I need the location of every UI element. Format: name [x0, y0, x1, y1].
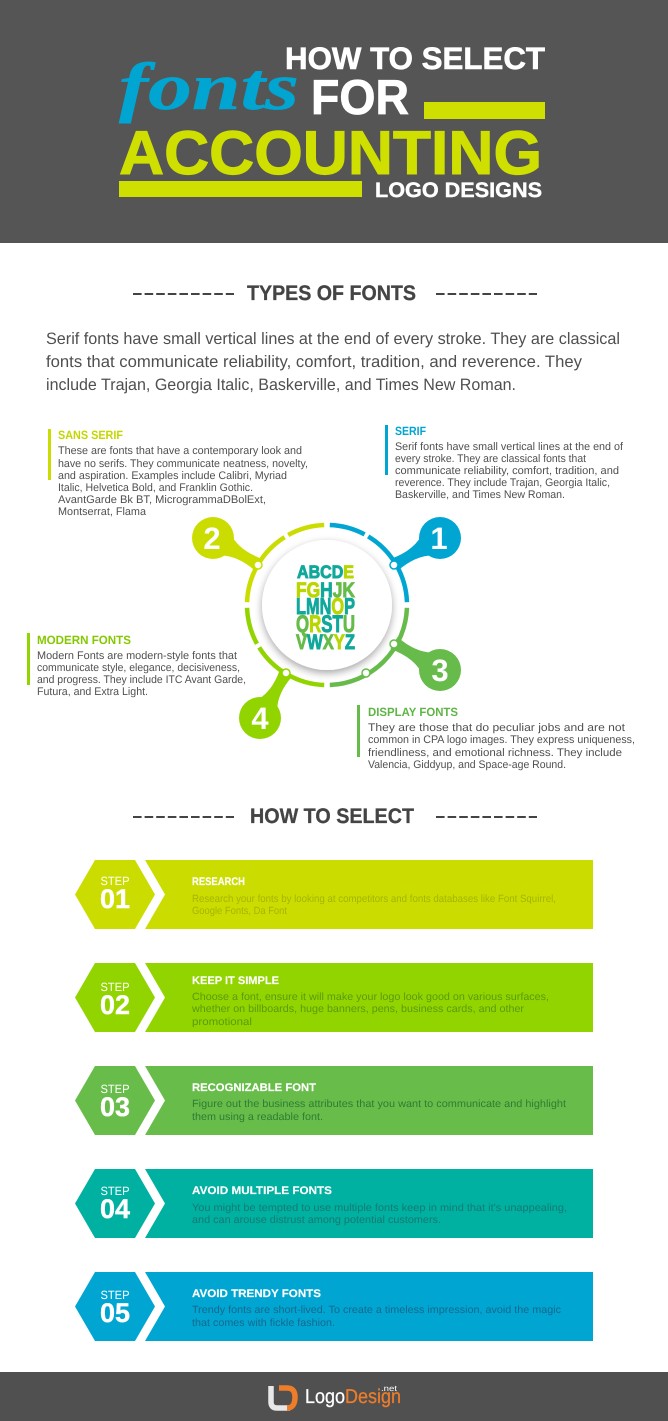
node 4: 4 [251, 701, 269, 736]
step 3: them using a readable font. [192, 1111, 323, 1123]
step 1: Research your fonts by looking at competitors and fonts databases like Font Squirrel, [192, 893, 556, 905]
title: how to select: HOW TO SELECT [285, 41, 545, 76]
step 2: 02 [100, 990, 130, 1020]
intro paragraph: include Trajan, Georgia Italic, Baskerville, and Times New Roman. [46, 376, 516, 394]
text block: display fonts: Valencia, Giddyup, and Space-age Round. [368, 759, 566, 771]
text block: sans serif: and aspiration. Examples include Calibri, Myriad [58, 470, 287, 482]
title accent bar right [424, 102, 545, 119]
text block: serif: communicate reliability, comfort, tradition, and [395, 465, 619, 477]
step 2 [75, 963, 593, 1032]
text block: modern fonts: Modern Fonts are modern-style fonts that [37, 650, 237, 662]
alphabet artwork: QRSTU [296, 611, 355, 638]
text block: sans serif: SANS SERIF [58, 428, 123, 442]
text block: modern fonts: Futura, and Extra Light. [37, 686, 148, 698]
step 1 [75, 860, 593, 929]
step 3: 03 [100, 1092, 130, 1122]
node 1 [390, 517, 461, 571]
title: logo designs: LOGO DESIGNS [375, 179, 542, 202]
text block: serif: Baskerville, and Times New Roman. [395, 489, 565, 501]
text block: sans serif [48, 428, 308, 518]
alphabet artwork: ABCDE [297, 562, 354, 582]
text block: sans serif: AvantGarde Bk BT, MicrogrammaDBolExt, [58, 494, 266, 506]
text block: display fonts: common in CPA logo images. They express uniqueness, [368, 734, 635, 746]
step 5: that comes with fickle fashion. [192, 1317, 335, 1329]
node 2 [192, 517, 262, 571]
step 1: STEP [100, 874, 130, 888]
alphabet artwork [296, 562, 355, 654]
step 3: RECOGNIZABLE FONT [192, 1082, 316, 1094]
text block: sans serif: Montserrat, Flama [58, 506, 147, 518]
title: accounting: ACCOUNTING [119, 119, 542, 188]
step 4: You might be tempted to use multiple fonts keep in mind that it's unappealing, [192, 1202, 567, 1214]
center disc [262, 540, 392, 670]
text block: display fonts: They are those that do peculiar jobs and are not [368, 722, 625, 734]
text block: serif: reverence. They include Trajan, Georgia Italic, [395, 477, 610, 489]
header banner [0, 0, 668, 243]
footer [0, 1372, 668, 1421]
step 4: STEP [100, 1184, 130, 1198]
step 4: AVOID MULTIPLE FONTS [192, 1185, 332, 1197]
step 2: STEP [100, 980, 130, 994]
step 5: 05 [100, 1298, 130, 1328]
text block: modern fonts [27, 633, 246, 698]
icon: logo mark [271, 1386, 295, 1408]
text block: sans serif: have no serifs. They communicate neatness, novelty, [58, 458, 308, 470]
step 2: Choose a font, ensure it will make your logo look good on various surfaces, [192, 991, 549, 1003]
step 1: 01 [100, 884, 130, 914]
step 4: 04 [100, 1194, 130, 1224]
step 3: Figure out the business attributes that you want to communicate and highlight [192, 1098, 566, 1110]
alphabet artwork: FGHJK [296, 579, 355, 602]
step 2: promotional [192, 1016, 252, 1028]
text block: serif: every stroke. They are classical fonts that [395, 453, 586, 465]
step 4: and can arouse distrust among potential customers. [192, 1214, 441, 1226]
text block: display fonts: DISPLAY FONTS [368, 705, 458, 719]
text block: modern fonts: MODERN FONTS [37, 633, 131, 647]
text block: modern fonts: communicate style, elegance, decisiveness, [37, 662, 240, 674]
circular diagram [192, 517, 461, 739]
text block: serif: SERIF [395, 424, 426, 438]
title: fonts: fonts [119, 50, 299, 124]
intro paragraph: Serif fonts have small vertical lines at the end of every stroke. They are classical [46, 330, 620, 348]
title accent bar left [119, 181, 362, 197]
title: for: FOR [311, 71, 409, 125]
step 3: STEP [100, 1082, 130, 1096]
step 5: AVOID TRENDY FONTS [192, 1288, 321, 1300]
intro paragraph: fonts that communicate reliability, comfort, tradition, and reverence. They [46, 353, 583, 371]
node 2: 2 [203, 521, 221, 556]
text block: serif: Serif fonts have small vertical lines at the end of [395, 441, 624, 453]
step 5 [75, 1272, 593, 1341]
step 1: RESEARCH [192, 876, 245, 888]
step 1: Google Fonts, Da Font [192, 905, 287, 917]
heading: types of fonts: TYPES OF FONTS [247, 282, 416, 305]
footer: Design [345, 1386, 401, 1408]
node 4 [239, 669, 292, 739]
ring segments [247, 525, 407, 685]
node 1: 1 [430, 521, 448, 556]
text block: display fonts [357, 705, 635, 771]
intro paragraph [46, 330, 620, 394]
step 4 [75, 1169, 593, 1238]
step 5: Trendy fonts are short-lived. To create a timeless impression, avoid the magic [192, 1304, 561, 1316]
text block: sans serif: Italic, Helvetica Bold, and Franklin Gothic. [58, 482, 253, 494]
step 2: whether on billboards, huge banners, pens, business cards, and other [191, 1003, 525, 1015]
footer: .net [381, 1384, 398, 1393]
logo wordmark: Logo [305, 1386, 345, 1408]
alphabet artwork: VWXYZ [296, 631, 355, 654]
text block: serif [385, 424, 624, 501]
node 3 [362, 637, 461, 691]
node 3: 3 [431, 653, 449, 688]
step 5: STEP [100, 1288, 130, 1302]
step 3 [75, 1066, 593, 1135]
step 2: KEEP IT SIMPLE [192, 975, 279, 987]
alphabet artwork: LMNOP [296, 593, 355, 619]
heading: how to select: HOW TO SELECT [250, 805, 414, 828]
text block: display fonts: friendliness, and emotional richness. They include [368, 747, 622, 759]
text block: sans serif: These are fonts that have a contemporary look and [58, 445, 302, 457]
text block: modern fonts: and progress. They include ITC Avant Garde, [37, 674, 246, 686]
